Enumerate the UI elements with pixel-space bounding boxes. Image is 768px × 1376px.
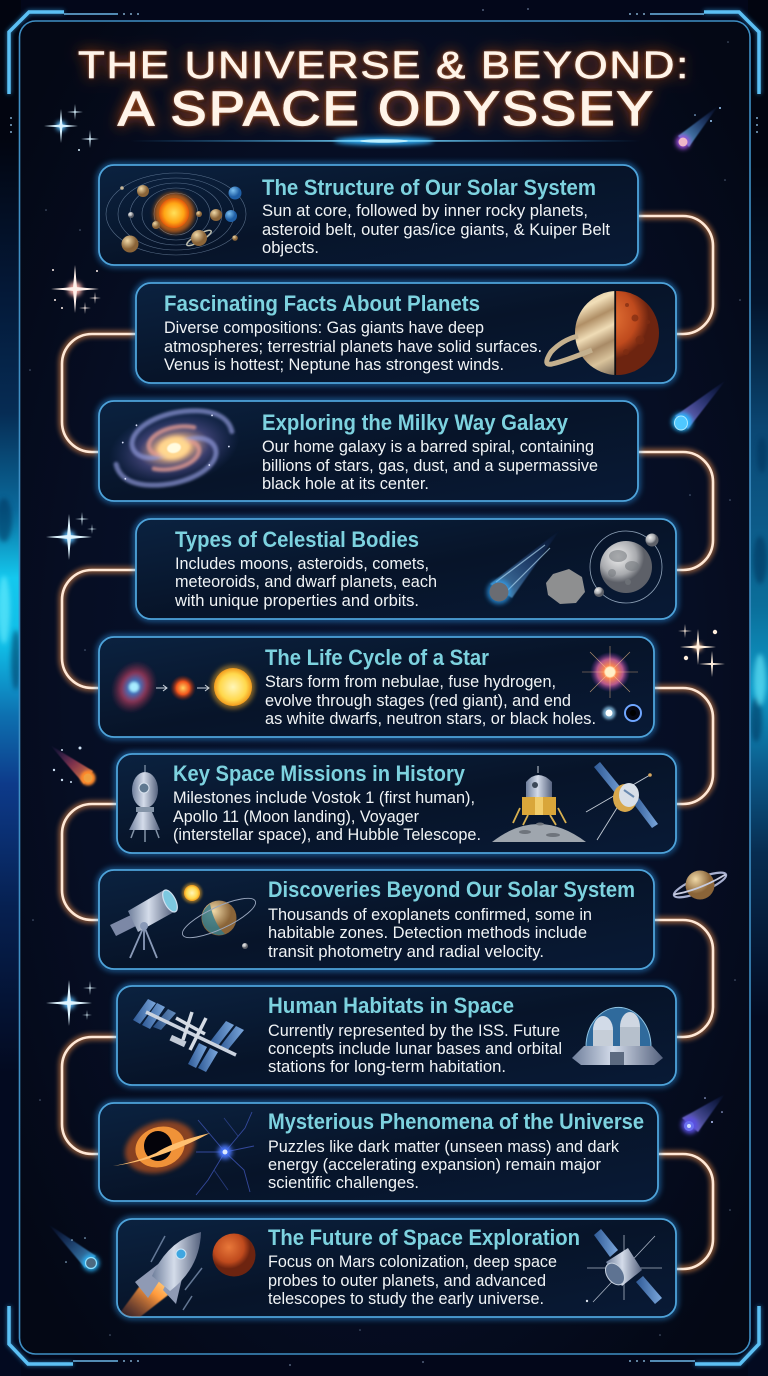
text block: Milestones include Vostok 1 (first human), — [173, 788, 475, 807]
icon: neutron star and black hole — [602, 705, 641, 721]
icon: exoplanet with orbit — [178, 891, 260, 949]
icon: nebula — [103, 653, 165, 721]
text block: Venus is hottest; Neptune has strongest winds. — [164, 355, 504, 374]
icon: yellow star — [211, 665, 255, 709]
connector 4 — [62, 570, 136, 688]
connector 6 — [62, 804, 117, 920]
icon: black hole — [113, 1112, 210, 1182]
comet: left orange — [50, 745, 96, 786]
text block — [173, 788, 481, 844]
text block — [268, 1021, 562, 1076]
text block — [174, 554, 437, 610]
text block: concepts include lunar bases and orbital — [268, 1039, 562, 1058]
text block: Apollo 11 (Moon landing), Voyager — [173, 807, 419, 826]
icon: yellow star — [182, 883, 202, 903]
heading: The Life Cycle of a Star — [265, 645, 489, 670]
title line 2: A SPACE ODYSSEY — [118, 83, 655, 136]
panel: exoplanet discoveries — [99, 870, 654, 969]
icon: lunar lander — [492, 766, 586, 842]
icon: red star — [170, 675, 196, 701]
text block: stations for long-term habitation. — [268, 1057, 506, 1076]
icon: space station — [133, 999, 244, 1072]
text block: transit photometry and radial velocity. — [268, 942, 544, 961]
text block: atmospheres; terrestrial planets have solid surfaces. — [164, 337, 542, 356]
icon: solar system — [106, 173, 246, 255]
heading: Fascinating Facts About Planets — [164, 291, 480, 316]
sparkles: top left — [44, 104, 99, 151]
text block — [164, 318, 542, 374]
text block — [265, 672, 596, 728]
panel: celestial bodies — [136, 519, 676, 619]
text block: energy (accelerating expansion) remain major — [268, 1155, 601, 1174]
text block: (interstellar space), and Hubble Telescope. — [173, 825, 481, 844]
connector 1 — [638, 216, 713, 334]
heading: Discoveries Beyond Our Solar System — [268, 877, 635, 902]
text block: Sun at core, followed by inner rocky planets, — [262, 201, 588, 220]
comet: right of phenomena card — [682, 1094, 725, 1134]
text block: as white dwarfs, neutron stars, or black holes. — [265, 709, 596, 728]
text block: evolve through stages (red giant), and end — [265, 691, 571, 710]
panel: solar system — [99, 165, 638, 265]
panel: human habitats — [117, 986, 676, 1085]
text block: habitable zones. Detection methods include — [268, 923, 587, 942]
icon: split planet — [547, 291, 659, 375]
connector 3 — [638, 452, 713, 570]
text block: Thousands of exoplanets confirmed, some in — [268, 905, 592, 924]
text block: black hole at its center. — [262, 474, 429, 493]
panel: planets — [136, 283, 676, 383]
icon: comet — [487, 530, 560, 604]
text block — [268, 1137, 619, 1192]
connector 9 — [658, 1154, 713, 1269]
panel: milky way — [99, 397, 638, 501]
icon: satellite — [586, 1229, 662, 1304]
heading: The Future of Space Exploration — [268, 1225, 580, 1250]
connector 7 — [654, 920, 713, 1037]
text block: probes to outer planets, and advanced — [268, 1271, 546, 1290]
icon: supernova — [582, 646, 638, 698]
connector 5 — [654, 688, 713, 804]
icon: telescope — [110, 888, 180, 958]
arrow — [156, 685, 167, 691]
text block: Stars form from nebulae, fuse hydrogen, — [265, 672, 556, 691]
icon: habitat dome — [572, 1007, 663, 1065]
sparkles: left of habitats card — [46, 980, 97, 1026]
comet: right of planets card — [672, 380, 726, 431]
title line 1: THE UNIVERSE & BEYOND: — [78, 45, 690, 87]
comet: left of future card — [48, 1224, 99, 1271]
icon: rocket — [117, 1232, 202, 1317]
icon: moon with orbit — [590, 531, 662, 603]
comet: top right — [676, 106, 721, 149]
panel: space missions — [117, 754, 676, 853]
icon: dark energy burst — [196, 1112, 254, 1195]
text block: Our home galaxy is a barred spiral, containing — [262, 437, 594, 456]
heading: The Structure of Our Solar System — [262, 175, 596, 200]
text block — [268, 1252, 557, 1308]
panel: star life cycle — [99, 637, 654, 737]
heading: Human Habitats in Space — [268, 993, 514, 1018]
text block: Focus on Mars colonization, deep space — [268, 1252, 557, 1271]
arrow — [197, 685, 209, 691]
heading: Types of Celestial Bodies — [175, 527, 419, 552]
sparkles: right of star card — [678, 624, 725, 677]
sparkles: left of celestial card — [46, 512, 97, 560]
title underline — [130, 137, 640, 145]
text block: scientific challenges. — [268, 1173, 419, 1192]
text block — [262, 201, 610, 257]
title — [78, 45, 690, 136]
text block: Puzzles like dark matter (unseen mass) and dark — [268, 1137, 619, 1156]
panel: future exploration — [117, 1219, 676, 1317]
icon: vostok capsule — [129, 765, 160, 842]
icon: galaxy — [102, 397, 246, 499]
text block: telescopes to study the early universe. — [268, 1289, 544, 1308]
icon: mars — [212, 1234, 256, 1276]
text block — [262, 437, 598, 493]
connector 8 — [62, 1037, 117, 1154]
heading: Key Space Missions in History — [173, 761, 466, 786]
icon: voyager probe — [586, 762, 658, 840]
text block: Includes moons, asteroids, comets, — [175, 554, 429, 573]
sparkles: left of planets card — [51, 265, 101, 314]
text block: billions of stars, gas, dust, and a supermassive — [262, 456, 598, 475]
planet: right of discoveries card — [671, 868, 729, 902]
text block: Currently represented by the ISS. Future — [268, 1021, 560, 1040]
icon: asteroid — [546, 569, 585, 604]
panel: mysterious phenomena — [99, 1103, 658, 1201]
text block: objects. — [262, 238, 319, 257]
connector 2 — [62, 334, 136, 452]
heading: Exploring the Milky Way Galaxy — [262, 410, 569, 435]
text block — [268, 905, 592, 961]
text block: Diverse compositions: Gas giants have deep — [164, 318, 484, 337]
text block: meteoroids, and dwarf planets, each — [175, 572, 437, 591]
text block: with unique properties and orbits. — [174, 591, 419, 610]
heading: Mysterious Phenomena of the Universe — [268, 1109, 644, 1134]
text block: asteroid belt, outer gas/ice giants, & Kuiper Belt — [262, 220, 610, 239]
